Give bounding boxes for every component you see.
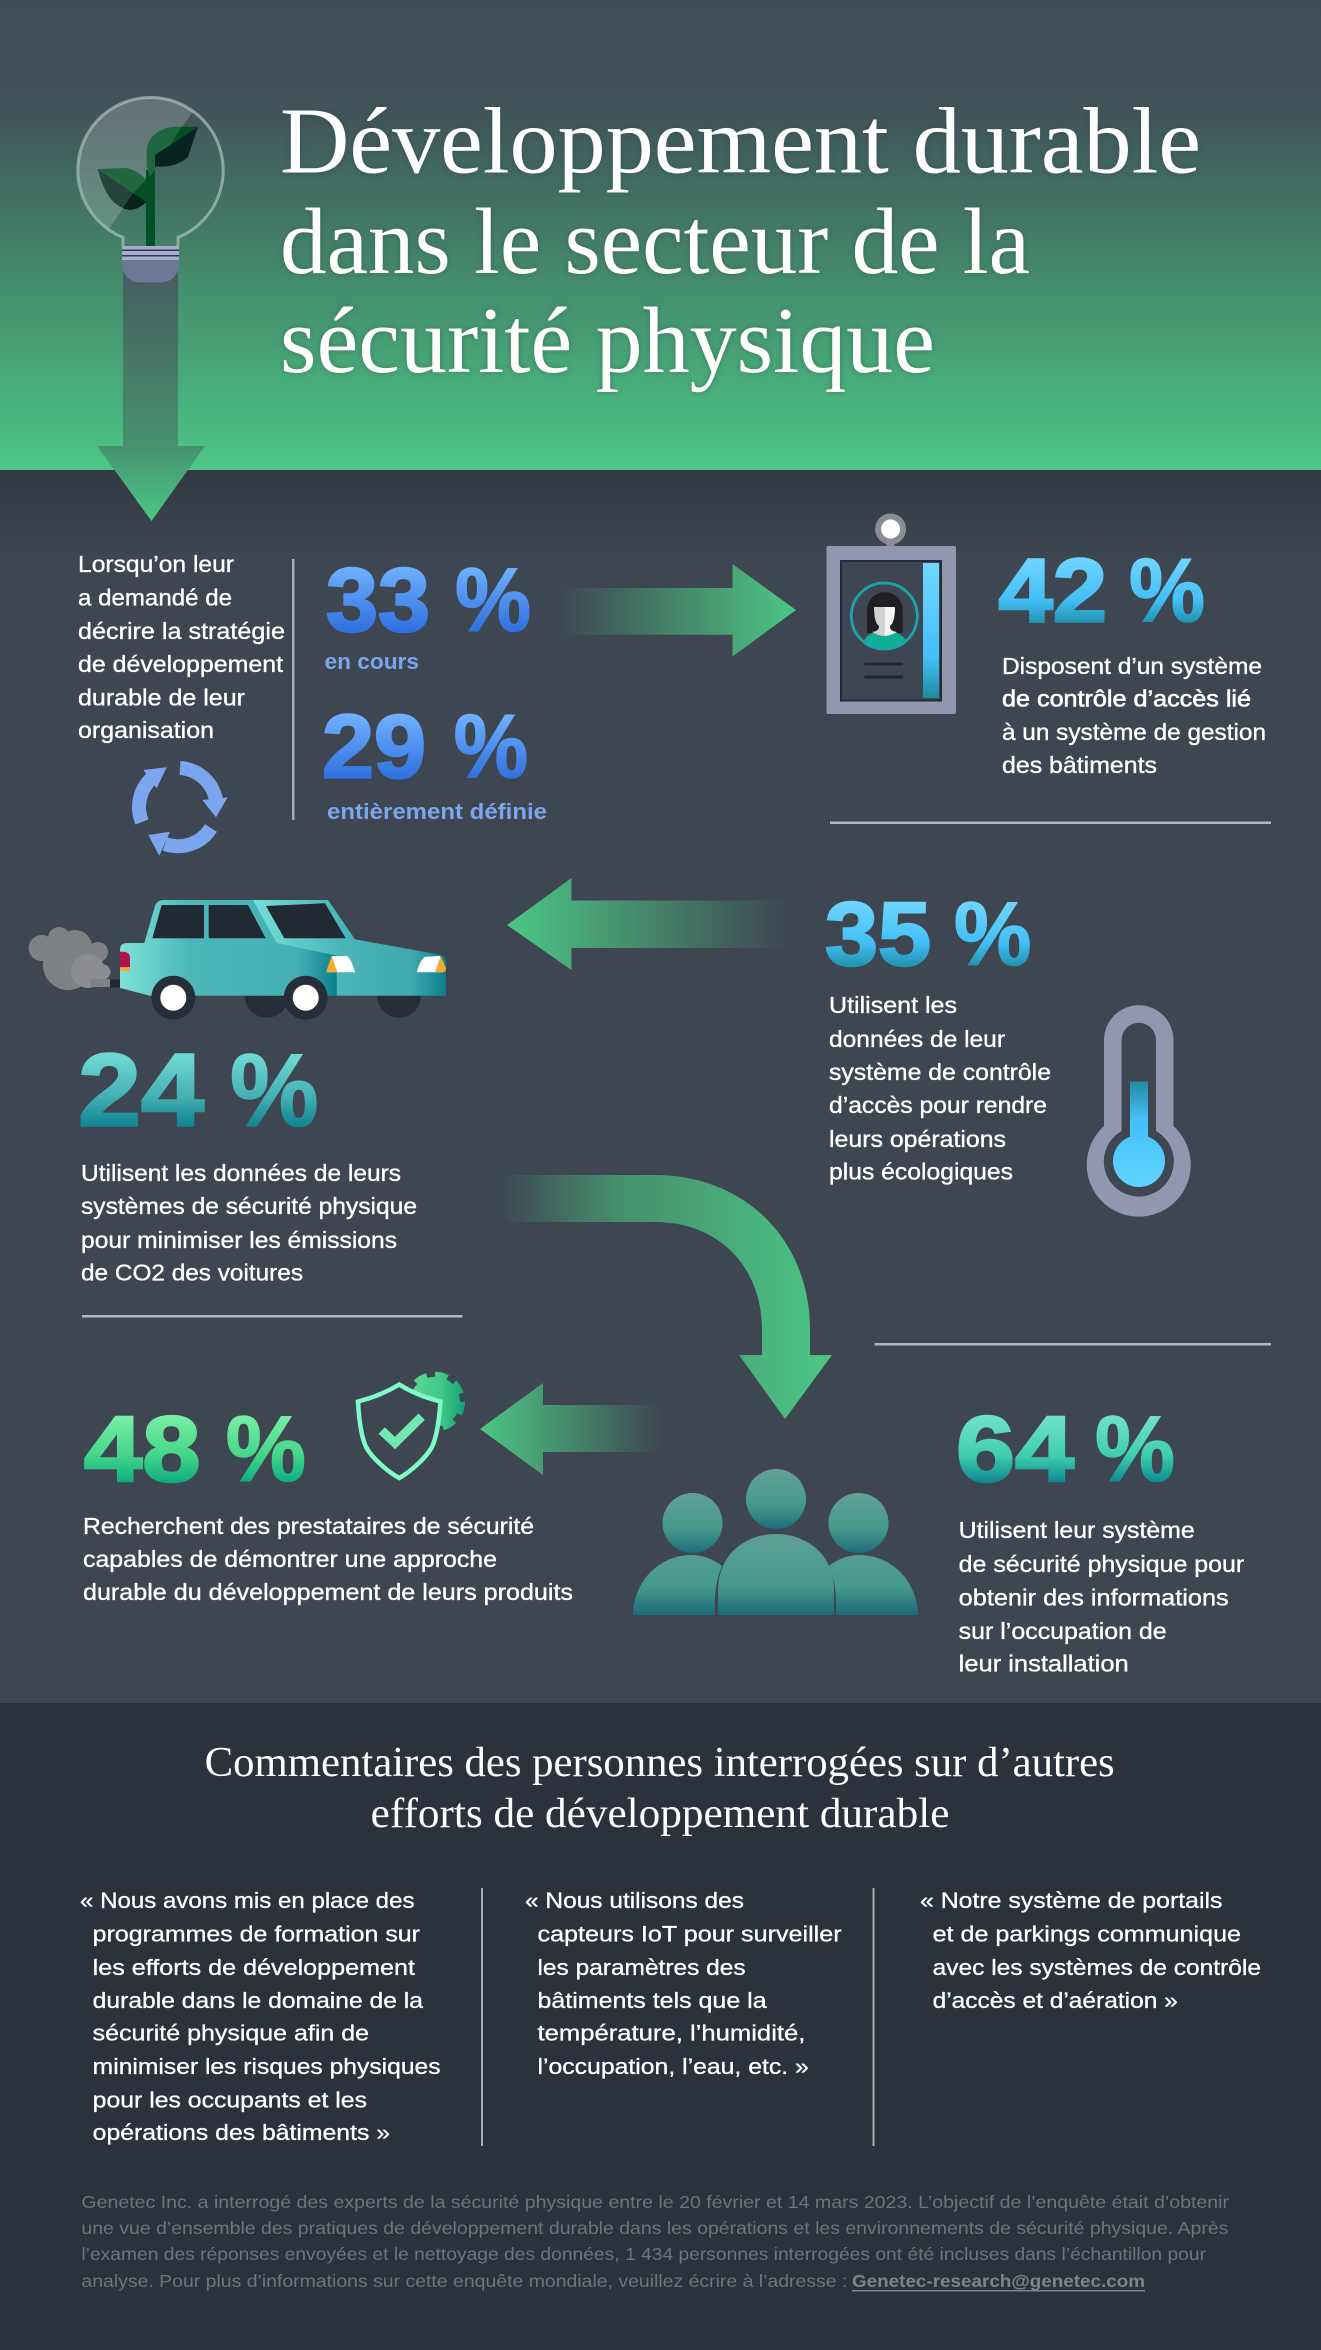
arrow: toward shield	[480, 1383, 661, 1475]
stat: 29 % entièrement définie: %	[454, 698, 528, 798]
text block: intro question	[78, 551, 285, 743]
title: dans le secteur de la	[280, 190, 1030, 294]
text block: 64 % description: sur l’occupation de	[959, 1618, 1167, 1644]
text block: survey methodology: analyse. Pour plus d’informations sur cette enquête mondiale, veuillez écrire à l’adresse :	[81, 2271, 847, 2291]
stat: 29 % entièrement définie: 29	[322, 698, 426, 798]
heading: comments: Commentaires des personnes interrogées sur d’autres	[205, 1740, 1115, 1786]
text block: intro question: de développement	[78, 651, 284, 677]
quote: column 2: « Nous utilisons des	[525, 1888, 744, 1913]
quote: column 2: l’occupation, l’eau, etc. »	[538, 2054, 809, 2079]
stat: 24 %: 24	[78, 1032, 204, 1148]
stat: 29 % entièrement définie: entièrement définie	[327, 799, 547, 824]
text block: intro question: décrire la stratégie	[78, 618, 285, 644]
quote: column 3	[920, 1888, 1261, 2013]
text block: 24 % description: systèmes de sécurité physique	[81, 1193, 417, 1219]
stat: 42 %: 42	[998, 542, 1107, 642]
text block: 24 % description: pour minimiser les émissions	[81, 1227, 397, 1253]
title: sécurité physique	[280, 289, 935, 393]
stat: 29 % entièrement définie	[322, 698, 547, 824]
text block: 35 % description: plus écologiques	[829, 1158, 1013, 1184]
text block: 64 % description: obtenir des informations	[959, 1585, 1229, 1611]
stat: 48 %	[84, 1397, 306, 1501]
arrow: from bulb downward	[97, 262, 205, 521]
icon: shield with gear	[358, 1376, 461, 1478]
text block: survey methodology: Genetec Inc. a interrogé des experts de la sécurité physique entre le 20 février et 14 mars 2023. L’objectif de l’enquête était d’obtenir	[81, 2192, 1229, 2212]
quote: column 2: température, l’humidité,	[538, 2021, 805, 2046]
text block: intro question: organisation	[78, 717, 214, 743]
quote: column 1: programmes de formation sur	[93, 1922, 420, 1947]
icon: cycle arrows	[139, 767, 228, 856]
text block: intro question: Lorsqu’on leur	[78, 551, 234, 577]
quote: column 2: les paramètres des	[538, 1955, 746, 1980]
quote: column 1	[80, 1888, 441, 2145]
icon: thermometer	[1087, 1005, 1191, 1217]
panel: respondent comments	[0, 1703, 1321, 2350]
icon: access badge	[826, 516, 956, 714]
text block: 48 % description: durable du développement de leurs produits	[83, 1579, 573, 1605]
quote: column 3: « Notre système de portails	[920, 1888, 1222, 1913]
stat: 35 %: %	[954, 885, 1031, 985]
text block: 64 % description	[959, 1517, 1245, 1677]
stat: 33 % en cours: en cours	[324, 649, 419, 674]
stat: 64 %: 64	[956, 1397, 1074, 1501]
text block: survey methodology: Genetec-research@genetec.com	[852, 2271, 1145, 2291]
quote: column 2	[525, 1888, 842, 2079]
icon: light bulb with plant	[76, 96, 225, 282]
text block: survey methodology: l’examen des réponses envoyées et le nettoyage des données, 1 434 personnes interrogées ont été incluses dans l’échantillon pour	[81, 2244, 1206, 2264]
text block: survey methodology	[81, 2192, 1229, 2292]
text block: 64 % description: Utilisent leur système	[959, 1517, 1195, 1543]
stat: 48 %: %	[226, 1397, 306, 1501]
stat: 24 %: %	[230, 1032, 319, 1148]
text block: 35 % description: données de leur	[829, 1026, 1005, 1052]
arrow: curved toward people	[500, 1175, 832, 1419]
quote: column 1: pour les occupants et les	[93, 2088, 367, 2113]
text block: 35 % description: Utilisent les	[829, 992, 957, 1018]
quote: column 3: et de parkings communique	[933, 1922, 1241, 1947]
stat: 33 % en cours: 33	[326, 551, 430, 651]
text block: 35 % description: leurs opérations	[829, 1126, 1006, 1152]
stat: 48 %: 48	[84, 1397, 200, 1501]
quote: column 2: bâtiments tels que la	[538, 1988, 767, 2013]
quote: column 1: durable dans le domaine de la	[93, 1988, 424, 2013]
text block: 64 % description: de sécurité physique pour	[959, 1551, 1245, 1577]
divider: intro	[292, 559, 294, 820]
stat: 42 %: %	[1129, 542, 1205, 642]
text block: 35 % description: d’accès pour rendre	[829, 1092, 1047, 1118]
text block: 48 % description: capables de démontrer une approche	[83, 1546, 497, 1572]
text block: 24 % description: Utilisent les données de leurs	[81, 1160, 401, 1186]
text block: 42 % description: à un système de gestion	[1002, 719, 1266, 745]
stat: 35 %	[825, 885, 1031, 985]
quote: column 1: les efforts de développement	[93, 1955, 415, 1980]
quote: column 1: opérations des bâtiments »	[93, 2120, 390, 2145]
stat: 64 %	[956, 1397, 1175, 1501]
text block: intro question: durable de leur	[78, 684, 245, 710]
arrow: toward car	[507, 878, 786, 970]
text block: 48 % description: Recherchent des prestataires de sécurité	[83, 1513, 534, 1539]
heading: comments	[205, 1740, 1115, 1837]
stat: 64 %: %	[1095, 1397, 1175, 1501]
quote: column 3: avec les systèmes de contrôle	[933, 1955, 1261, 1980]
quote: column 1: sécurité physique afin de	[93, 2021, 369, 2046]
text block: intro question: a demandé de	[78, 584, 232, 610]
stat: 42 %	[998, 542, 1205, 642]
quote: column 1: « Nous avons mis en place des	[80, 1888, 414, 1913]
arrow: to badge	[560, 564, 796, 656]
quote: column 2: capteurs IoT pour surveiller	[538, 1922, 842, 1947]
text block: survey methodology: une vue d’ensemble des pratiques de développement durable dans les opérations et les environnements de sécurité physique. Après	[81, 2218, 1229, 2238]
quote: column 1: minimiser les risques physiques	[93, 2054, 441, 2079]
text block: 42 % description: des bâtiments	[1002, 752, 1157, 778]
heading: comments: efforts de développement durable	[371, 1791, 949, 1837]
quote: column 3: d’accès et d’aération »	[933, 1988, 1178, 2013]
stat: 24 %	[78, 1032, 319, 1148]
text block: 64 % description: leur installation	[959, 1651, 1129, 1677]
title	[280, 90, 1201, 393]
stat: 35 %: 35	[825, 885, 931, 985]
text block: 35 % description: système de contrôle	[829, 1059, 1051, 1085]
text block: 24 % description	[81, 1160, 417, 1286]
icon: car with exhaust smoke	[29, 900, 446, 1020]
title: Développement durable	[280, 90, 1201, 194]
stat: 33 % en cours: %	[455, 551, 531, 651]
text block: 35 % description	[829, 992, 1051, 1184]
text block: 42 % description: Disposent d’un système	[1002, 653, 1262, 679]
text block: 48 % description	[83, 1513, 573, 1605]
stat: 33 % en cours	[324, 551, 531, 674]
text block: 42 % description	[1002, 653, 1266, 778]
icon: people	[633, 1469, 918, 1615]
text block: 24 % description: de CO2 des voitures	[81, 1260, 303, 1286]
panel: header band	[0, 0, 1321, 560]
text block: 42 % description: de contrôle d’accès lié	[1002, 686, 1251, 712]
